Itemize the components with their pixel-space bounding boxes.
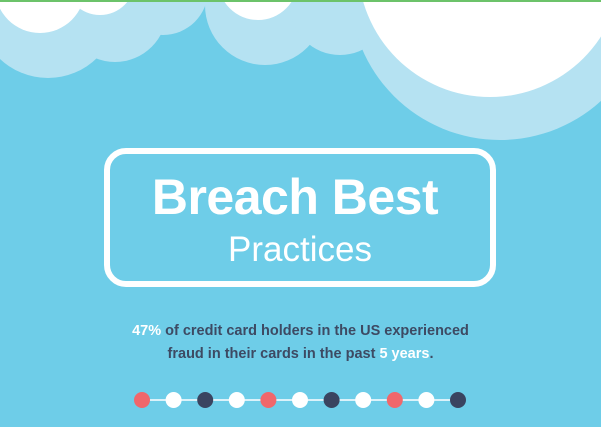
subtitle: Practices — [228, 230, 372, 269]
statistic text: 47% of credit card holders in the US experienced — [132, 323, 469, 339]
statistic text — [132, 323, 469, 362]
title box — [104, 148, 496, 287]
dot timeline — [134, 392, 466, 408]
title: Breach Best — [152, 169, 438, 225]
statistic text: fraud in their cards in the past 5 years. — [168, 346, 433, 362]
